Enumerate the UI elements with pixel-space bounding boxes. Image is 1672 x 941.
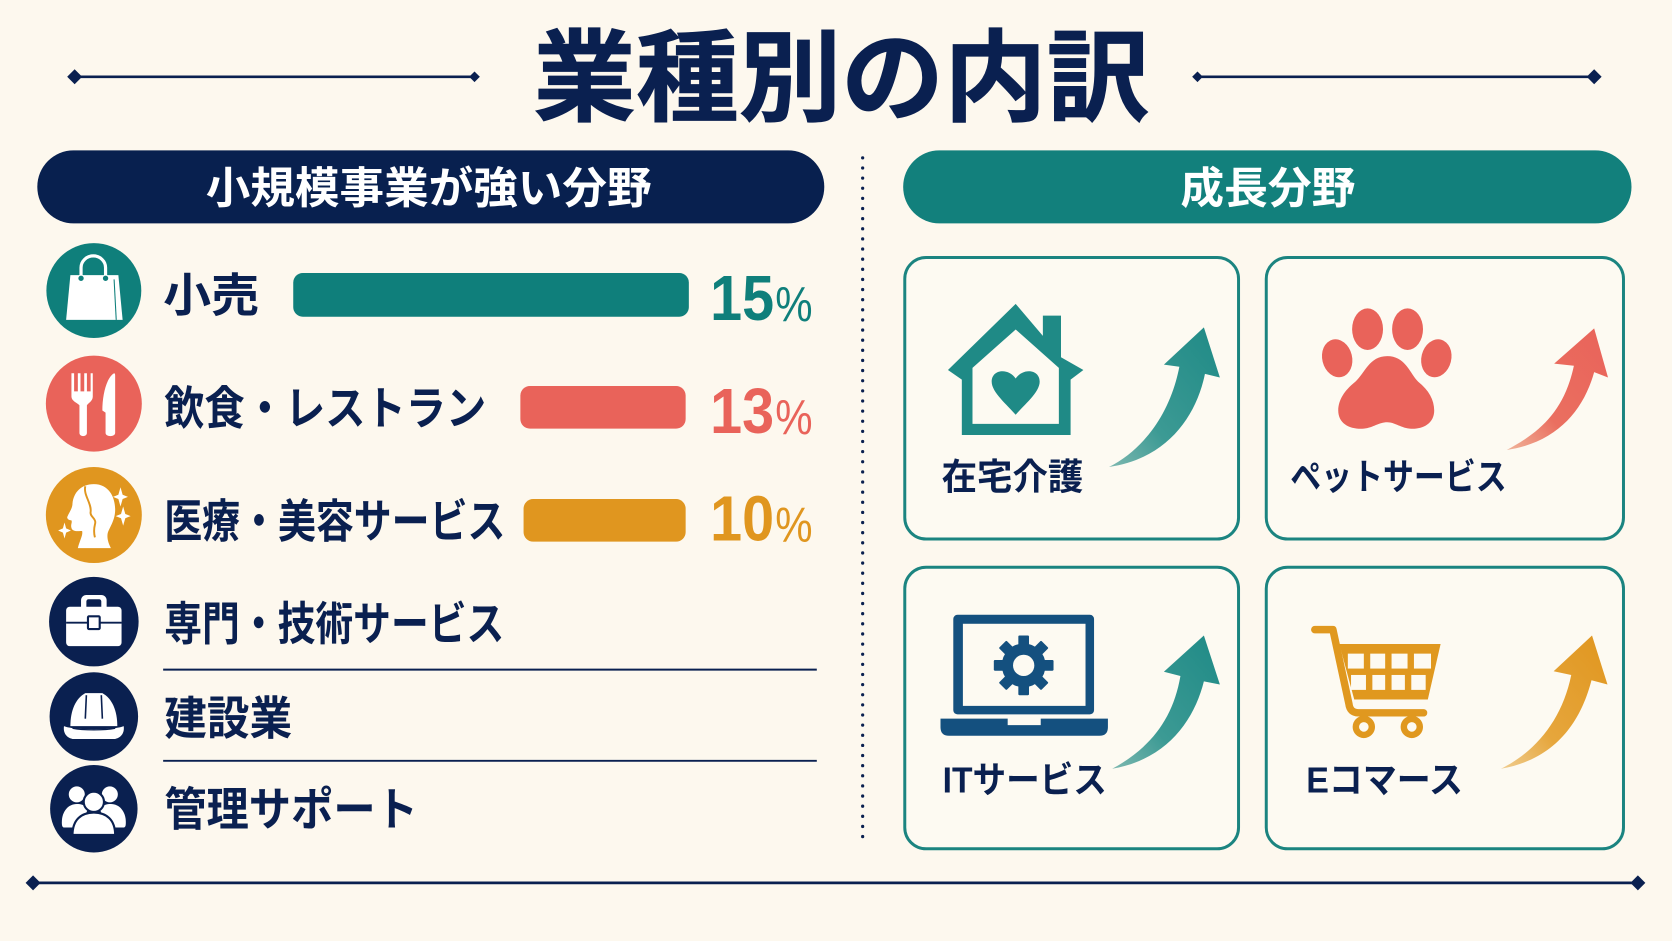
icon: fork and knife [46,356,142,452]
value: 15%: % [775,278,813,332]
value: 13%: % [775,391,813,445]
bar: restaurants 13% [520,386,686,429]
icon: shopping bag [46,243,141,338]
card: IT services [905,567,1239,849]
label: e-commerce: Eコマース [1306,759,1463,800]
row: medical and beauty [46,467,813,563]
title ornament left [67,69,480,84]
panel: small business strengths [37,150,824,852]
label: retail: 小売 [163,269,259,321]
value: 13% [710,375,813,447]
label: medical and beauty: 医療・美容サービス [164,495,505,547]
value: 13%: 13 [710,375,774,447]
row: professional and technical services [49,577,504,666]
value: 15% [710,262,813,334]
icon: paw [1318,308,1455,429]
panel: growth sectors [903,150,1631,849]
value: 10%: 10 [710,483,774,555]
icon: house with heart [948,304,1083,435]
card: home care [905,258,1239,539]
icon: laptop with gear [940,615,1108,736]
label: pet services: ペットサービス [1290,456,1507,497]
icon: hard hat [50,672,138,761]
icon: people group [50,765,138,852]
row: construction [50,672,292,761]
value: 10%: % [775,499,813,553]
arrow: growth orange [1501,636,1607,769]
heading pill: small business [37,150,824,223]
arrow: growth coral [1507,328,1608,450]
label: professional services: 専門・技術サービス [164,598,504,650]
title: 業種別の内訳 [533,23,1150,135]
label: restaurants: 飲食・レストラン [164,382,486,434]
arrow: growth teal [1109,327,1220,467]
footer ornament line [26,875,1645,890]
icon: briefcase [49,577,139,666]
card: e-commerce [1266,567,1623,849]
value: 10% [710,483,813,555]
bar: retail 15% [293,273,689,317]
card: pet services [1266,258,1623,539]
value: 15%: 15 [710,262,774,334]
row: retail [46,243,813,338]
label: construction: 建設業 [164,693,292,745]
icon: shopping cart [1315,630,1441,735]
heading pill: growth sectors [903,150,1631,223]
title ornament right [1192,69,1602,84]
icon: beauty profile [46,467,142,563]
heading pill: small business: 小規模事業が強い分野 [206,165,652,214]
row: restaurants [46,356,813,452]
label: home care: 在宅介護 [942,456,1083,497]
label: management support: 管理サポート [164,783,418,835]
heading pill: growth sectors: 成長分野 [1180,165,1355,214]
bar: medical and beauty 10% [524,499,686,542]
label: IT services: ITサービス [943,759,1107,800]
row: management support [50,765,418,852]
arrow: growth teal [1112,636,1220,769]
